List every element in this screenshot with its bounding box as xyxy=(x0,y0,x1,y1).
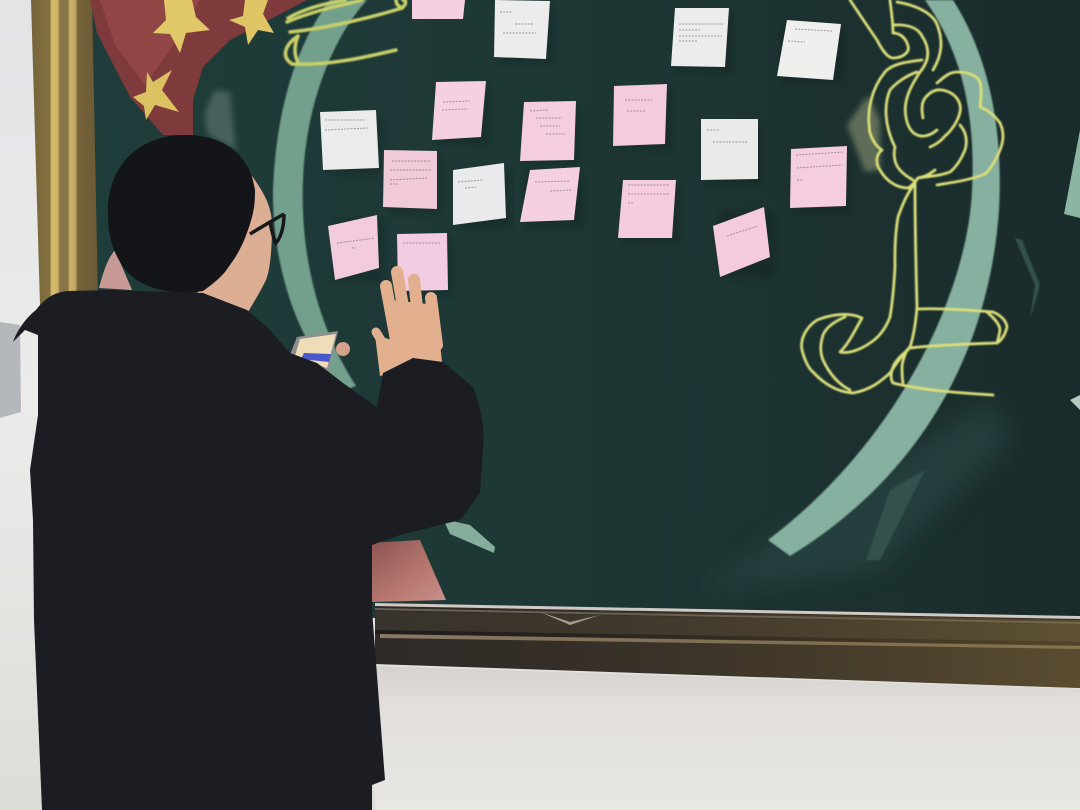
chalkboard xyxy=(92,0,1080,618)
note: row 2 pink xyxy=(432,81,486,140)
icon: gold star right xyxy=(229,0,274,45)
chalkboard frame: bottom xyxy=(375,603,1080,688)
person: face and neck xyxy=(195,176,272,312)
chalk drawing: yellow ribbon figure xyxy=(802,0,1007,395)
note: row 3 pink xyxy=(618,180,676,238)
note: row 4 pink tilted xyxy=(713,207,770,277)
note: row 4 pink left xyxy=(328,215,379,280)
chalk drawing: yellow flourish top xyxy=(285,0,406,64)
note: row 3 pink xyxy=(383,150,437,209)
chalk drawing: red flag xyxy=(90,0,307,135)
chalkboard frame: left xyxy=(31,0,98,305)
person: hair xyxy=(108,135,255,293)
chalk smudge: gray patch by ribbon xyxy=(847,95,880,172)
note: top white 2 xyxy=(671,8,729,67)
chalk drawing: green fragment right edge xyxy=(1064,130,1080,218)
chalk smudge: lower right wash xyxy=(700,400,1010,590)
lower wall xyxy=(375,666,1080,810)
note: top pink xyxy=(412,0,465,19)
person: raised hand against board xyxy=(375,272,442,376)
icon: gold star lower xyxy=(133,70,179,120)
note: top white 1 xyxy=(494,0,550,59)
wall switch xyxy=(0,322,21,418)
note: row 2 pink xyxy=(520,101,576,161)
chalk drawing: green stroke below sleeve xyxy=(443,519,495,553)
person: black jacket xyxy=(13,290,484,810)
sticky notes xyxy=(320,0,851,296)
note: row 2 white centre xyxy=(701,119,758,180)
chalk drawing: pink tassel upper xyxy=(99,250,132,290)
chalk smudge: lower right streaks xyxy=(866,238,1040,560)
person: phone in hand xyxy=(289,331,350,371)
note: row 4 pink near hand xyxy=(397,233,448,291)
person: glasses xyxy=(250,214,284,243)
chalk drawing: green arc left xyxy=(273,0,367,390)
note: row 3 white xyxy=(453,163,506,225)
chalk smudge: gray patch by flag xyxy=(204,90,236,150)
note shadows xyxy=(326,5,851,296)
note: top white 3 xyxy=(777,20,841,80)
chalk drawing: pink tassel lower xyxy=(368,540,446,602)
scribbled handwriting marks xyxy=(325,12,844,248)
note: row 2 pink xyxy=(613,84,667,146)
note: row 2 white left xyxy=(320,110,379,170)
icon: gold star large xyxy=(153,0,210,53)
note: row 3 pink xyxy=(520,167,580,222)
chalk drawing: green arc right xyxy=(768,0,1000,556)
note: row 2 pink right xyxy=(790,146,847,208)
person xyxy=(13,135,484,810)
